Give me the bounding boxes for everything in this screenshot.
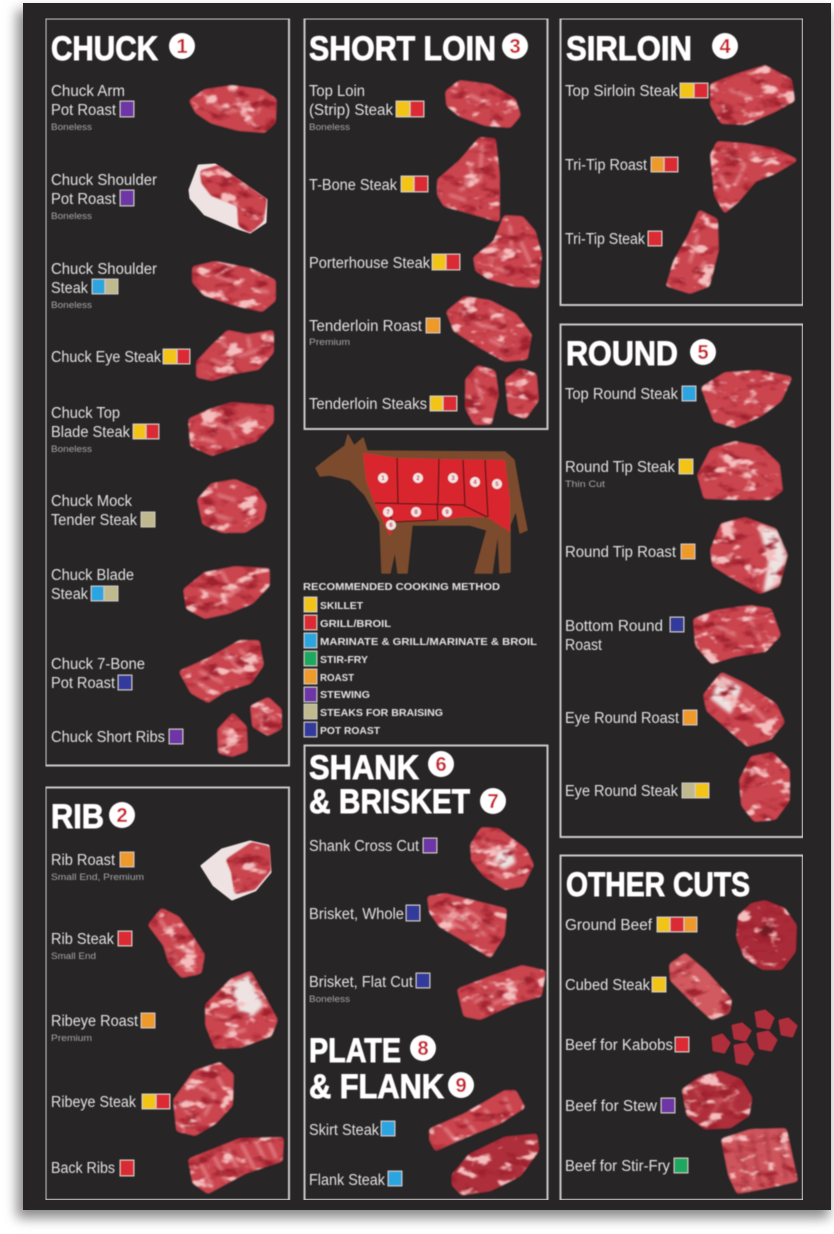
item: beef for stir-fry xyxy=(565,1130,796,1192)
item: top sirloin steak xyxy=(565,67,793,123)
item: chuck shoulder steak xyxy=(51,261,274,311)
item: rib roast: Small End, Premium xyxy=(51,872,144,883)
item: top round steak: Top Round Steak xyxy=(565,386,678,403)
cut map: 6 xyxy=(389,523,393,529)
icon: ribeye roast cut xyxy=(207,973,276,1047)
panel: other cuts xyxy=(560,856,803,1200)
item: tenderloin steaks xyxy=(309,367,537,423)
item: top sirloin steak: Top Sirloin Steak xyxy=(565,83,678,100)
item: brisket whole xyxy=(309,895,505,956)
item: ribeye roast: Premium xyxy=(51,1033,92,1044)
icon: ribeye steak cut xyxy=(175,1064,232,1134)
item: chuck shoulder pot roast: Chuck Shoulder xyxy=(51,172,157,189)
icon: rib steak cut xyxy=(150,910,203,976)
heading: round: 5 xyxy=(697,342,709,364)
item: rib steak xyxy=(51,910,203,976)
icon: skirt steak cut xyxy=(431,1092,523,1149)
heading: chuck: 1 xyxy=(176,36,188,58)
icon: rib roast cut xyxy=(202,842,270,899)
item: beef for stew xyxy=(565,1072,751,1128)
item: ribeye roast xyxy=(51,973,276,1047)
item: brisket flat cut: Brisket, Flat Cut xyxy=(309,974,414,991)
cow silhouette xyxy=(316,435,527,573)
heading: other cuts: OTHER CUTS xyxy=(566,866,750,904)
item: tenderloin roast: Tenderloin Roast xyxy=(309,318,423,335)
heading: rib xyxy=(51,798,135,836)
heading: sirloin: 4 xyxy=(719,36,731,58)
cut map: 9 xyxy=(445,510,449,516)
item: tenderloin roast: Premium xyxy=(309,337,350,348)
icon: beef cubes for kabobs xyxy=(713,1011,796,1064)
item: tri-tip steak: Tri-Tip Steak xyxy=(565,231,645,248)
item: chuck arm pot roast: Pot Roast xyxy=(51,102,117,119)
panel: rib xyxy=(46,788,289,1200)
icon: back ribs cut xyxy=(190,1139,282,1192)
icon: ground beef xyxy=(736,900,797,970)
item: chuck 7-bone pot roast: Chuck 7-Bone xyxy=(51,656,145,673)
heading: short loin: SHORT LOIN xyxy=(309,30,496,68)
heading: plate and flank: 8 xyxy=(417,1038,429,1060)
cut map: 8 xyxy=(414,510,418,516)
icon: chuck arm cut xyxy=(191,87,275,131)
item: beef for kabobs xyxy=(565,1011,796,1064)
item: flank steak: Flank Steak xyxy=(309,1172,385,1189)
item: tri-tip roast: Tri-Tip Roast xyxy=(565,157,648,174)
icon: chuck mock tender cut xyxy=(199,481,265,531)
icon: top round cut xyxy=(703,372,790,426)
heading: shank and brisket: 7 xyxy=(487,791,499,813)
cut map: 4 xyxy=(473,480,477,486)
icon: beef strips for stir-fry xyxy=(723,1130,796,1192)
item: chuck arm pot roast: Boneless xyxy=(51,122,92,133)
item: back ribs: Back Ribs xyxy=(51,1160,115,1177)
icon: chuck short ribs cut xyxy=(219,699,280,755)
item: round tip roast: Round Tip Roast xyxy=(565,544,677,561)
item: tenderloin steaks: Tenderloin Steaks xyxy=(309,396,427,413)
cow diagram xyxy=(316,435,527,573)
heading: chuck: CHUCK xyxy=(51,30,158,68)
icon: chuck eye cut xyxy=(198,332,272,379)
item: bottom round roast: Bottom Round xyxy=(565,618,663,635)
item: shank cross cut: Shank Cross Cut xyxy=(309,838,420,855)
item: porterhouse steak xyxy=(309,217,540,286)
cut map xyxy=(363,453,510,537)
item: chuck top blade steak: Chuck Top xyxy=(51,405,120,422)
icon: brisket flat cut xyxy=(459,967,544,1018)
legend: recommended cooking method: STEWING xyxy=(320,689,370,701)
item: rib roast xyxy=(51,842,270,899)
item: t-bone steak: T-Bone Steak xyxy=(309,177,397,194)
item: chuck mock tender steak: Chuck Mock xyxy=(51,493,132,510)
item: chuck eye steak: Chuck Eye Steak xyxy=(51,349,161,366)
item: chuck blade steak: Chuck Blade xyxy=(51,567,134,584)
item: bottom round roast xyxy=(565,607,779,662)
icon: shank cross cut xyxy=(472,829,532,888)
item: chuck 7-bone pot roast: Pot Roast xyxy=(51,675,116,692)
icon: beef for stew xyxy=(683,1072,751,1128)
heading: shank and brisket: & BRISKET xyxy=(309,783,470,821)
item: shank cross cut xyxy=(309,829,532,888)
icon: eye round roast cut xyxy=(705,674,783,745)
icon: chuck shoulder cut xyxy=(190,165,266,232)
item: chuck top blade steak xyxy=(51,404,272,455)
heading: shank and brisket: 6 xyxy=(435,754,447,776)
item: chuck eye steak xyxy=(51,332,272,379)
item: chuck shoulder steak: Boneless xyxy=(51,300,92,311)
icon: round tip steak cut xyxy=(699,443,781,498)
panel: round xyxy=(560,324,803,837)
item: bottom round roast: Roast xyxy=(565,637,603,654)
item: chuck short ribs xyxy=(51,699,280,755)
item: back ribs xyxy=(51,1139,282,1192)
cut map: 7 xyxy=(386,510,390,516)
item: cubed steak: Cubed Steak xyxy=(565,977,650,994)
item: rib steak: Rib Steak xyxy=(51,931,114,948)
legend: recommended cooking method: POT ROAST xyxy=(320,725,381,737)
cut map: 1 xyxy=(381,476,385,482)
item: chuck blade steak: Steak xyxy=(51,586,88,603)
item: ribeye roast: Ribeye Roast xyxy=(51,1013,139,1030)
heading: plate and flank: 9 xyxy=(455,1075,467,1097)
item: tri-tip roast xyxy=(565,143,795,211)
item: skirt steak: Skirt Steak xyxy=(309,1122,379,1139)
legend: recommended cooking method: RECOMMENDED COOKING METHOD xyxy=(303,581,500,593)
item: chuck mock tender steak: Tender Steak xyxy=(51,512,137,529)
item: chuck shoulder steak: Steak xyxy=(51,280,88,297)
item: top round steak xyxy=(565,372,790,426)
legend: recommended cooking method: STEAKS FOR BRAISING xyxy=(320,707,443,719)
item: beef for stew: Beef for Stew xyxy=(565,1098,658,1115)
heading: plate and flank: & FLANK xyxy=(309,1068,444,1106)
item: eye round steak xyxy=(565,754,788,820)
icon: eye round steak cut xyxy=(741,754,788,820)
icon: round tip roast cut xyxy=(712,519,786,592)
item: tri-tip steak xyxy=(565,212,717,292)
item: top loin strip steak: (Strip) Steak xyxy=(309,102,393,119)
icon: bottom round cut xyxy=(695,607,779,662)
item: beef for kabobs: Beef for Kabobs xyxy=(565,1037,673,1054)
item: brisket whole: Brisket, Whole xyxy=(309,906,404,923)
panel: chuck xyxy=(46,18,289,766)
legend: recommended cooking method: MARINATE & GRILL/MARINATE & BROIL xyxy=(320,636,538,648)
icon: cubed steak xyxy=(671,955,730,1018)
cut map: 2 xyxy=(416,476,420,482)
heading: rib: RIB xyxy=(51,798,104,836)
icon: brisket whole cut xyxy=(429,895,505,956)
heading: shank and brisket xyxy=(309,749,506,821)
legend: recommended cooking method: SKILLET xyxy=(320,600,364,612)
item: ribeye steak: Ribeye Steak xyxy=(51,1094,136,1111)
legend: recommended cooking method xyxy=(303,581,538,737)
item: ground beef: Ground Beef xyxy=(565,917,653,934)
item: brisket flat cut xyxy=(309,967,544,1018)
item: chuck 7-bone pot roast xyxy=(51,642,262,701)
panel: short loin xyxy=(304,18,548,429)
item: porterhouse steak: Porterhouse Steak xyxy=(309,255,430,272)
item: chuck top blade steak: Blade Steak xyxy=(51,424,130,441)
legend: recommended cooking method: ROAST xyxy=(320,672,355,684)
item: skirt steak xyxy=(309,1092,523,1149)
icon: chuck 7-bone cut xyxy=(181,642,262,701)
cut map: 3 xyxy=(451,476,455,482)
item: chuck short ribs: Chuck Short Ribs xyxy=(51,729,165,746)
item: chuck arm pot roast xyxy=(51,83,275,133)
item: round tip roast xyxy=(565,519,786,592)
item: chuck shoulder pot roast: Boneless xyxy=(51,211,92,222)
item: beef for stir-fry: Beef for Stir-Fry xyxy=(565,1158,670,1175)
item: top loin strip steak: Boneless xyxy=(309,122,350,133)
icon: tenderloin roast cut xyxy=(448,298,530,360)
item: eye round roast: Eye Round Roast xyxy=(565,710,680,727)
item: round tip steak: Thin Cut xyxy=(565,479,605,490)
item: top loin strip steak xyxy=(309,82,519,133)
heading: rib: 2 xyxy=(116,805,128,827)
icon: chuck blade cut xyxy=(185,568,268,617)
heading: plate and flank xyxy=(309,1032,474,1106)
item: chuck shoulder steak: Chuck Shoulder xyxy=(51,261,157,278)
item: t-bone steak xyxy=(309,139,498,220)
heading: plate and flank: PLATE xyxy=(309,1032,401,1070)
item: eye round roast xyxy=(565,674,783,745)
item: ground beef xyxy=(565,900,797,970)
icon: chuck top blade cut xyxy=(190,404,272,454)
item: round tip steak: Round Tip Steak xyxy=(565,459,675,476)
icon: tenderloin steaks cuts xyxy=(467,367,537,423)
heading: round: ROUND xyxy=(566,335,678,373)
heading: short loin: 3 xyxy=(509,36,521,58)
item: eye round steak: Eye Round Steak xyxy=(565,783,678,800)
heading: sirloin: SIRLOIN xyxy=(566,30,692,68)
icon: top loin cut xyxy=(447,82,519,126)
item: chuck shoulder pot roast xyxy=(51,165,266,232)
legend: recommended cooking method: STIR-FRY xyxy=(320,654,368,666)
item: cubed steak xyxy=(565,955,730,1018)
item: chuck shoulder pot roast: Pot Roast xyxy=(51,191,117,208)
item: chuck blade steak xyxy=(51,567,268,617)
item: chuck mock tender steak xyxy=(51,481,265,531)
item: chuck arm pot roast: Chuck Arm xyxy=(51,83,125,100)
item: ribeye steak xyxy=(51,1064,232,1134)
icon: tri-tip steak cut xyxy=(668,212,717,292)
panel: sirloin xyxy=(560,18,803,305)
heading: shank and brisket: SHANK xyxy=(309,749,419,787)
icon: chuck shoulder steak cut xyxy=(194,263,274,310)
icon: flank steak cut xyxy=(453,1135,538,1194)
panel: shank, brisket, plate and flank xyxy=(304,746,548,1200)
item: top loin strip steak: Top Loin xyxy=(309,83,365,100)
item: tenderloin roast xyxy=(309,298,530,360)
item: rib roast: Rib Roast xyxy=(51,852,116,869)
icon: porterhouse cut xyxy=(475,217,540,286)
icon: top sirloin cut xyxy=(712,67,793,123)
icon: tri-tip roast cut xyxy=(712,143,795,211)
item: flank steak xyxy=(309,1135,538,1194)
icon: t-bone cut xyxy=(439,139,498,220)
cut map: 5 xyxy=(495,482,499,488)
item: brisket flat cut: Boneless xyxy=(309,994,350,1005)
item: rib steak: Small End xyxy=(51,951,96,962)
item: round tip steak xyxy=(565,443,781,498)
legend: recommended cooking method: GRILL/BROIL xyxy=(320,618,392,630)
item: chuck top blade steak: Boneless xyxy=(51,444,92,455)
